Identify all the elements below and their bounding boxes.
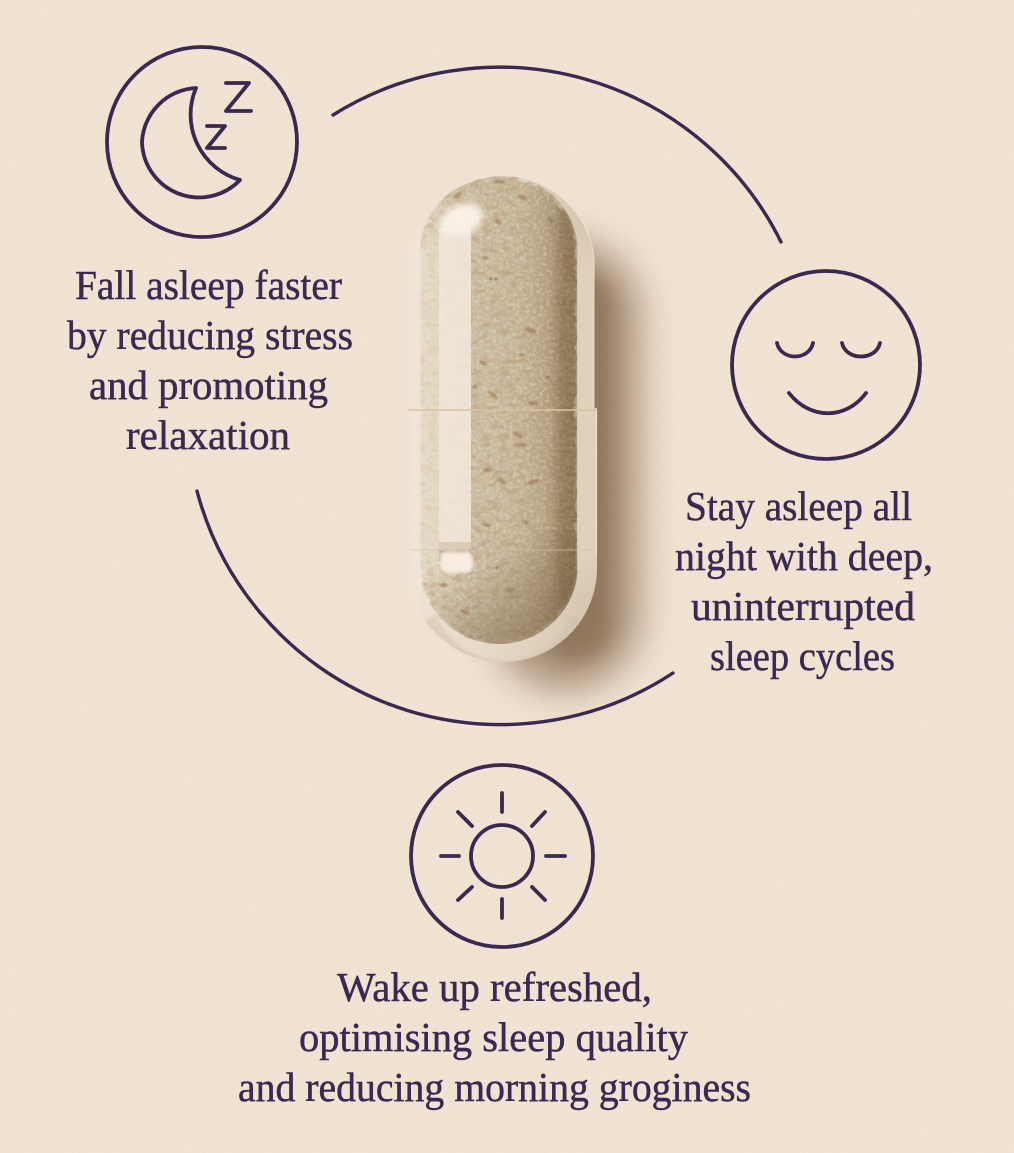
text: wake up: and reducing morning groginess	[238, 1064, 751, 1110]
text: wake up: Wake up refreshed,	[337, 964, 652, 1010]
capsule powder fill	[420, 174, 580, 644]
text: stay asleep: night with deep,	[675, 533, 933, 579]
text: wake up	[238, 964, 751, 1110]
arrow arc: bottom	[197, 491, 673, 725]
text: fall asleep: relaxation	[126, 412, 290, 458]
text: fall asleep: by reducing stress	[67, 312, 353, 358]
text: stay asleep: Stay asleep all	[685, 483, 912, 529]
text: stay asleep: uninterrupted	[691, 583, 915, 629]
icon: moon and Zs	[107, 47, 297, 237]
text: stay asleep	[675, 483, 933, 679]
capsule shadow	[490, 240, 640, 690]
text: fall asleep: and promoting	[89, 362, 328, 408]
icon: smiling face	[732, 271, 920, 459]
text: stay asleep: sleep cycles	[710, 633, 895, 679]
capsule powder flecks	[439, 180, 571, 616]
text: fall asleep	[67, 262, 353, 458]
capsule	[408, 174, 601, 668]
capsule shell	[409, 176, 597, 662]
arrow arc: top	[333, 67, 781, 242]
icon: sun	[411, 765, 593, 947]
text: fall asleep: Fall asleep faster	[75, 262, 342, 308]
capsule glass highlights	[411, 197, 601, 668]
capsule join band	[408, 176, 597, 555]
text: wake up: optimising sleep quality	[299, 1014, 688, 1060]
